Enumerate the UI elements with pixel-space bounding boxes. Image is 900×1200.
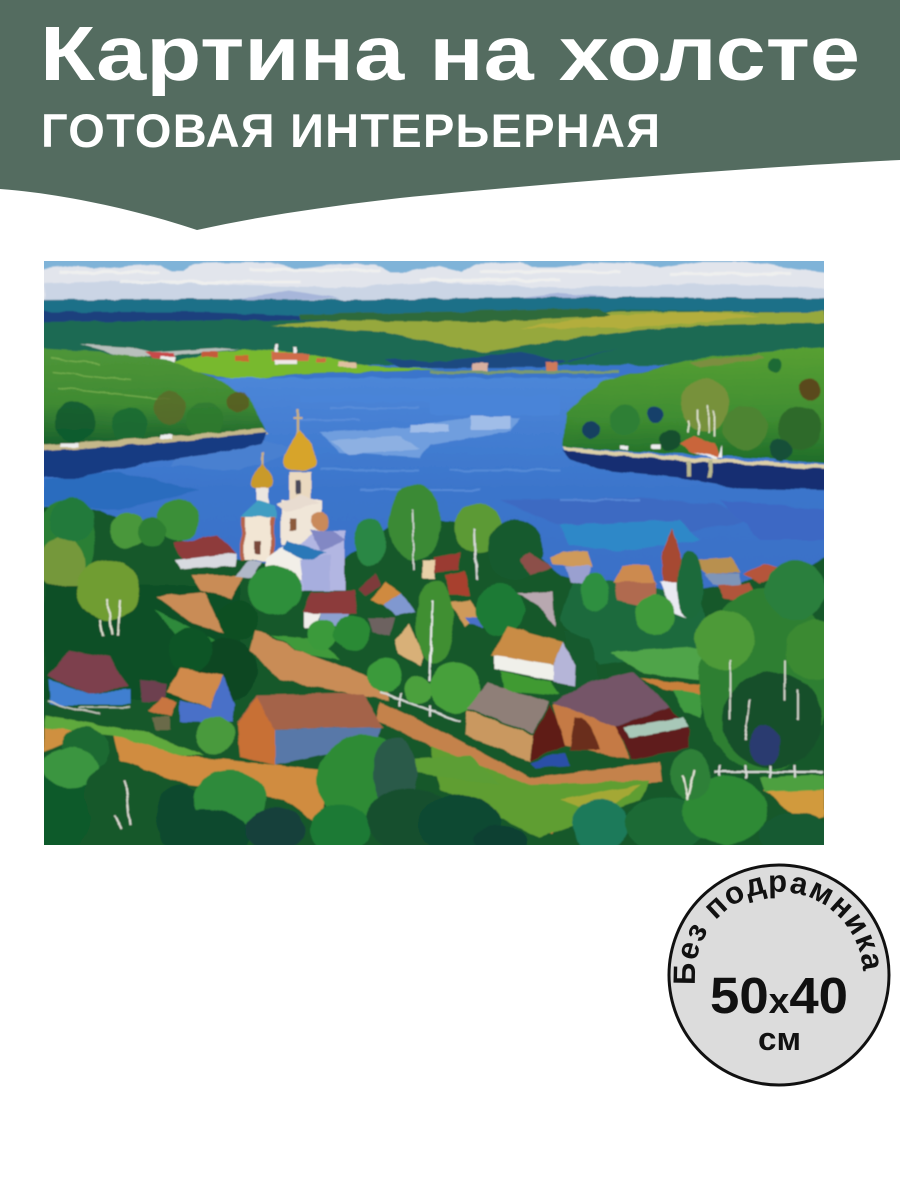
large barn — [237, 693, 382, 765]
right trees — [693, 559, 824, 772]
lake — [30, 378, 840, 600]
size value: 50x40 — [710, 967, 848, 1024]
foreground barns — [465, 672, 690, 768]
unit: см — [758, 1021, 801, 1057]
far shore village — [145, 345, 620, 374]
church — [235, 410, 346, 590]
distant hills — [30, 297, 840, 368]
foreground land — [30, 505, 840, 860]
bright meadow — [170, 350, 440, 380]
size badge — [668, 864, 890, 1086]
roads — [44, 575, 824, 835]
village buildings — [173, 528, 790, 665]
painting: village by the lake — [28, 250, 845, 860]
mid trees — [168, 551, 703, 713]
meadows — [44, 610, 824, 838]
right hill — [563, 346, 840, 490]
curved label: Без подрамника — [674, 875, 879, 983]
left houses — [47, 650, 235, 754]
title: Картина на холсте — [40, 11, 860, 97]
sky and clouds — [44, 261, 824, 302]
fences — [380, 692, 824, 778]
foreground house: white — [492, 627, 576, 695]
subtitle: ГОТОВАЯ ИНТЕРЬЕРНАЯ — [41, 104, 660, 157]
left hill — [30, 348, 268, 478]
far trees — [35, 484, 712, 700]
header banner — [0, 0, 900, 230]
foreground trees — [44, 726, 820, 845]
